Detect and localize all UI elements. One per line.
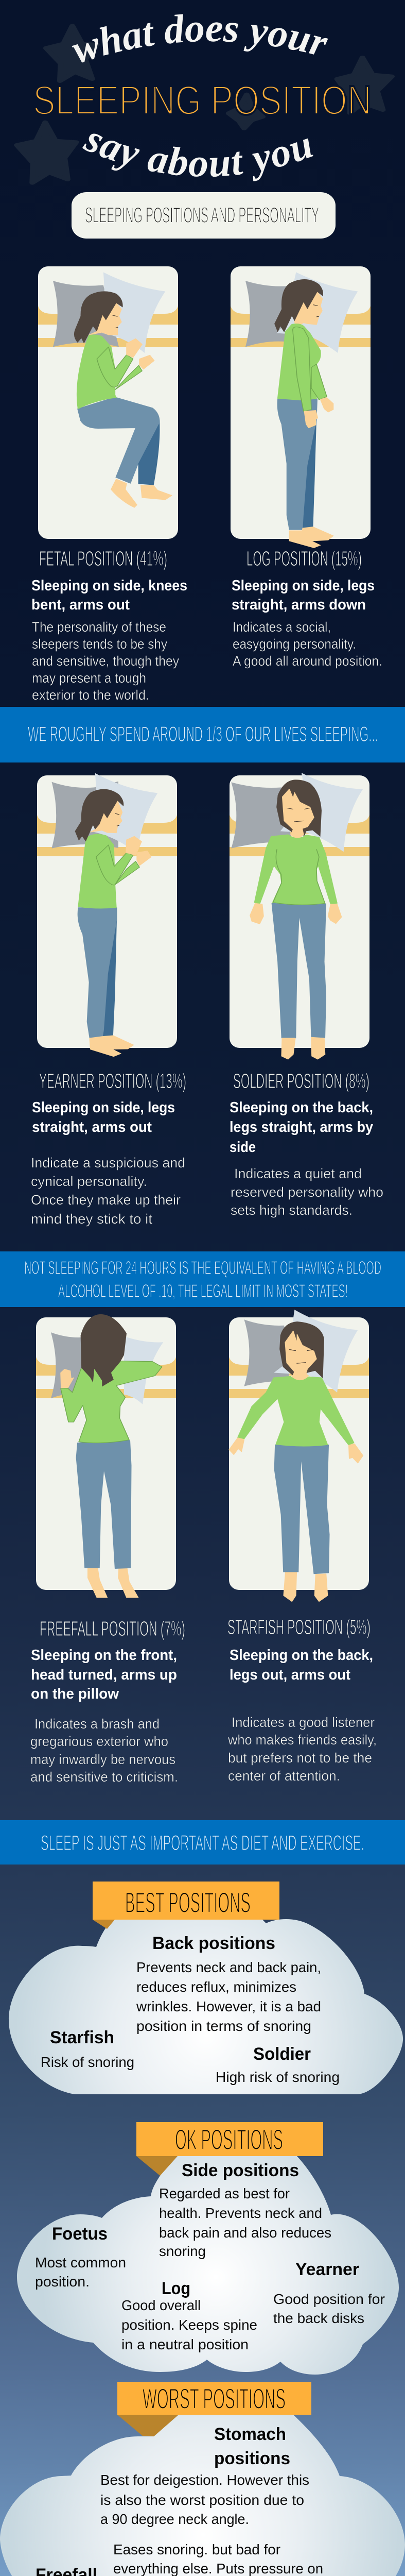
cloud <box>9 1911 403 2094</box>
log position text <box>232 547 382 669</box>
description: Once they make up their <box>31 1192 181 1208</box>
description: may inwardly be nervous <box>30 1752 175 1767</box>
starfish: Risk of snoring <box>41 2054 134 2070</box>
soldier <box>216 2044 340 2085</box>
soldier: High risk of snoring <box>216 2069 340 2085</box>
subheading <box>31 578 187 613</box>
ribbon: best positions <box>93 1882 279 1920</box>
description: Indicates a social, <box>233 619 331 635</box>
figure: fetal <box>53 272 172 507</box>
heading: fetal position: FETAL POSITION (41%) <box>39 547 167 570</box>
description: easygoing personality. <box>233 636 356 652</box>
panel: starfish position <box>229 1310 369 1601</box>
subheading: legs straight, arms by <box>230 1119 373 1136</box>
side positions: Regarded as best for <box>159 2185 290 2201</box>
starfish <box>41 2028 134 2070</box>
freefall: Eases snoring. but bad for <box>113 2541 280 2557</box>
description <box>227 1715 377 1784</box>
description: who makes friends easily, <box>227 1732 377 1748</box>
side positions: Side positions <box>182 2161 299 2180</box>
subheading <box>31 1647 177 1702</box>
panel: log position <box>231 266 371 548</box>
subheading: Sleeping on side, knees <box>31 578 187 594</box>
banner: not sleeping for 24 hours <box>0 1251 405 1307</box>
description: exterior to the world. <box>32 687 149 703</box>
foetus: Most common <box>35 2255 126 2270</box>
yearner <box>273 2260 385 2326</box>
subheading: straight, arms down <box>232 597 366 613</box>
stomach positions: is also the worst position due to <box>100 2492 304 2508</box>
description <box>231 1166 383 1218</box>
description: sleepers tends to be shy <box>32 636 167 652</box>
subheading <box>232 578 375 613</box>
subheading: straight, arms out <box>32 1119 152 1136</box>
stomach positions <box>100 2425 309 2527</box>
stomach positions: Best for deigestion. However this <box>100 2472 309 2488</box>
ribbon fold <box>136 2156 178 2176</box>
back positions: wrinkles. However, it is a bad <box>136 1998 321 2014</box>
ribbon: ok positions <box>136 2122 323 2156</box>
bed <box>229 1317 369 1590</box>
ribbon: worst positions <box>117 2382 311 2415</box>
side positions <box>159 2161 331 2259</box>
log: in a neutral position <box>121 2336 249 2352</box>
description <box>32 619 179 703</box>
description: Indicates a good listener <box>232 1715 375 1730</box>
log: Log <box>162 2279 190 2298</box>
panel: freefall position <box>36 1314 176 1598</box>
foetus: Foetus <box>52 2224 108 2244</box>
description: reserved personality who <box>231 1184 383 1200</box>
back positions: reduces reflux, minimizes <box>136 1979 296 1995</box>
bed <box>38 266 178 539</box>
bed <box>231 266 371 539</box>
subheading: legs out, arms out <box>230 1667 350 1683</box>
back positions: position in terms of snoring <box>136 2018 311 2034</box>
side positions: back pain and also reduces <box>159 2225 331 2241</box>
fetal position text <box>31 547 187 703</box>
subtitle pill <box>72 192 336 239</box>
decorative stars <box>17 26 392 183</box>
banner: sleep as important as diet <box>0 1820 405 1865</box>
description: but prefers not to be the <box>228 1750 372 1766</box>
log <box>121 2279 257 2352</box>
description: gregarious exterior who <box>30 1734 168 1749</box>
log: Good overall <box>121 2297 201 2313</box>
figure: soldier <box>231 773 363 1059</box>
figure: yearner <box>51 773 157 1057</box>
description <box>30 1716 178 1785</box>
subheading <box>230 1099 373 1156</box>
starfish: Starfish <box>50 2028 114 2047</box>
title line: what does your: what does your <box>72 14 328 63</box>
description: Indicates a brash and <box>34 1716 160 1732</box>
panel: soldier position <box>230 773 369 1059</box>
side positions: health. Prevents neck and <box>159 2205 322 2221</box>
soldier position text <box>230 1069 383 1218</box>
subheading: Sleeping on the back, <box>230 1099 373 1116</box>
title line: say about you: say about you <box>82 134 313 181</box>
panel: yearner position <box>37 773 177 1057</box>
back positions: Back positions <box>152 1934 275 1953</box>
description <box>233 619 382 669</box>
freefall <box>36 2541 323 2576</box>
panel: fetal position <box>38 266 178 539</box>
description: The personality of these <box>32 619 166 635</box>
description: mind they stick to it <box>31 1211 152 1227</box>
subheading: on the pillow <box>31 1686 119 1702</box>
description <box>31 1155 185 1227</box>
side positions: snoring <box>159 2243 206 2259</box>
section: worst positions <box>0 2382 405 2576</box>
title <box>33 14 372 181</box>
subheading: Sleeping on the back, <box>230 1647 373 1664</box>
foetus: position. <box>35 2274 90 2290</box>
cloud <box>0 2406 405 2576</box>
figure: freefall <box>51 1314 163 1598</box>
back positions <box>136 1934 321 2034</box>
description: cynical personality. <box>31 1174 147 1189</box>
cloud <box>17 2148 399 2375</box>
bed <box>36 1317 176 1590</box>
subheading: Sleeping on the front, <box>31 1647 177 1664</box>
subheading: head turned, arms up <box>31 1667 177 1683</box>
section: ok positions <box>17 2122 399 2375</box>
yearner position text <box>31 1069 186 1227</box>
heading: yearner position: YEARNER POSITION (13%) <box>39 1069 186 1093</box>
subheading: bent, arms out <box>31 597 130 613</box>
subheading <box>32 1099 175 1136</box>
description: center of attention. <box>228 1768 340 1784</box>
foetus <box>35 2224 126 2290</box>
section: best positions <box>9 1882 403 2094</box>
subheading <box>230 1647 373 1683</box>
ribbon fold <box>117 2415 179 2436</box>
log: position. Keeps spine <box>121 2317 257 2333</box>
banner: one third of lives <box>0 707 405 762</box>
soldier: Soldier <box>253 2044 311 2064</box>
subheading: Sleeping on side, legs <box>32 1099 175 1116</box>
figure: log <box>245 272 358 548</box>
description: sets high standards. <box>231 1202 353 1218</box>
description: and sensitive, though they <box>32 653 179 669</box>
yearner: Yearner <box>295 2260 359 2279</box>
subheading: Sleeping on side, legs <box>232 578 375 594</box>
yearner: the back disks <box>273 2310 364 2326</box>
description: A good all around position. <box>233 653 382 669</box>
heading: freefall position: FREEFALL POSITION (7%) <box>40 1617 185 1640</box>
ribbon: best positions: BEST POSITIONS <box>125 1886 251 1919</box>
yearner: Good position for <box>273 2291 385 2307</box>
description: Indicate a suspicious and <box>31 1155 185 1171</box>
stomach positions: positions <box>214 2449 290 2468</box>
ribbon fold <box>93 1920 115 1929</box>
bed <box>230 775 369 1048</box>
figure: starfish <box>229 1310 363 1601</box>
stomach positions: a 90 degree neck angle. <box>100 2511 249 2527</box>
starfish position text <box>227 1615 377 1784</box>
description: Indicates a quiet and <box>234 1166 362 1181</box>
ribbon: ok positions: OK POSITIONS <box>175 2123 283 2156</box>
bed <box>37 775 177 1048</box>
freefall position text <box>30 1617 185 1785</box>
description: and sensitive to criticism. <box>30 1769 178 1785</box>
subheading: side <box>230 1139 256 1156</box>
back positions: Prevents neck and back pain, <box>136 1959 321 1975</box>
stomach positions: Stomach <box>214 2425 286 2444</box>
description: may present a tough <box>32 670 146 686</box>
